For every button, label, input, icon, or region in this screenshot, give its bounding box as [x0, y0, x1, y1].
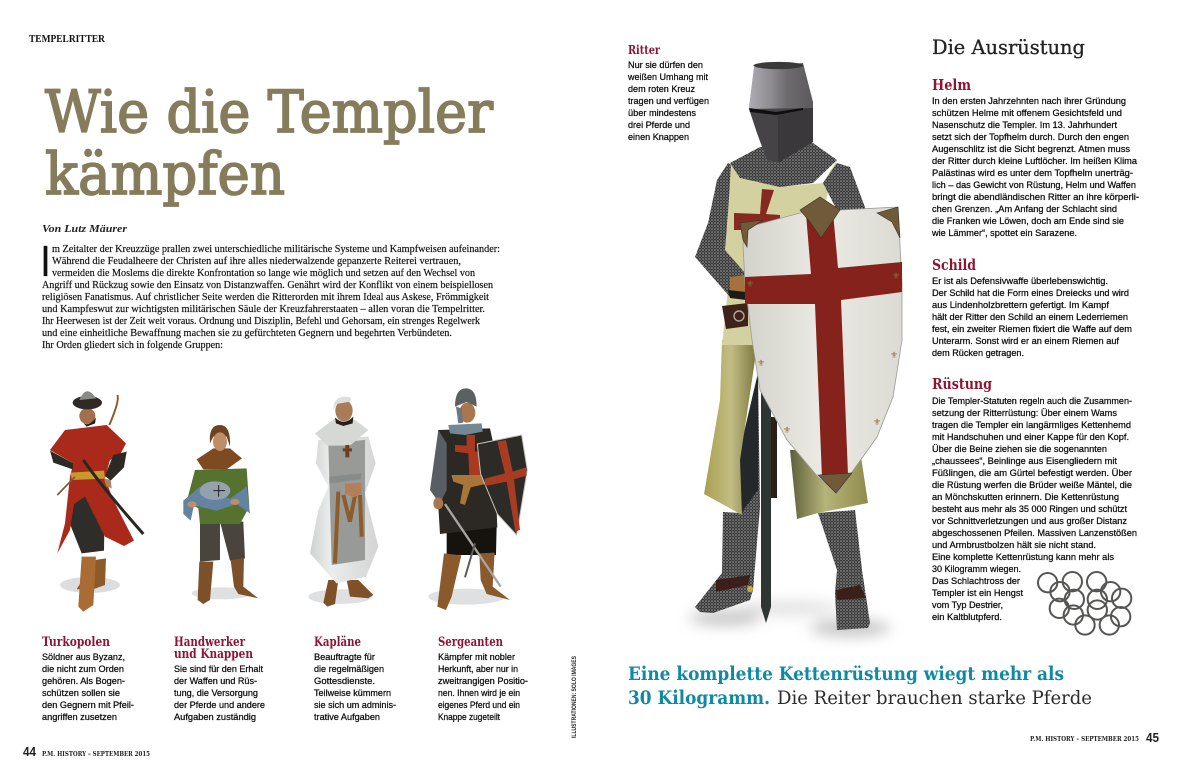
section: Rüstung: Templer ist ein Hengst — [932, 587, 1023, 598]
section: Helm — [931, 76, 1139, 238]
Ritter caption: über mindestens — [628, 107, 696, 118]
section: Schild: Unterarm. Sonst wird er an einem Riemen auf — [932, 335, 1119, 346]
ground shadow — [689, 601, 890, 636]
footer left — [23, 745, 150, 759]
Ritter caption: drei Pferde und — [628, 119, 690, 130]
caption: Kapläne: sie sich um adminis- — [314, 699, 396, 710]
caption: Kapläne: Gottesdienste. — [314, 675, 375, 686]
byline: Von Lutz Mäurer — [42, 223, 128, 235]
section: Rüstung: ein Kaltblutpferd. — [932, 611, 1002, 622]
section: Rüstung — [932, 375, 1137, 622]
caption: Turkopolen: Söldner aus Byzanz, — [42, 651, 125, 662]
shield: ⚜ — [757, 359, 765, 369]
caption: Handwerker und Knappen: Handwerker — [174, 635, 245, 650]
section: Schild — [932, 256, 1132, 358]
Ritter caption: tragen und verfügen — [628, 95, 709, 106]
section: Helm: Augenschlitz ist die Sicht begrenzt. Atmen muss — [932, 143, 1130, 154]
footer right — [1030, 731, 1159, 745]
section: Helm: Nasenschutz die Templer. Im 13. Jahrhundert — [932, 119, 1117, 130]
caption: Turkopolen: angriffen zusetzen — [42, 711, 117, 722]
shield: ⚜ — [873, 418, 881, 428]
caption: Sergeanten: zweitrangigen Positio- — [438, 675, 528, 686]
shield: ⚜ — [890, 351, 898, 361]
caption: Turkopolen — [42, 635, 134, 722]
caption: Turkopolen: die nicht zum Orden — [42, 663, 124, 674]
section: Helm: der Ritter durch kleine Luftlöcher. Im heißen Klima — [932, 155, 1138, 166]
intro text: I — [42, 237, 49, 286]
footer left: P.M. HISTORY – SEPTEMBER 2015 — [42, 750, 150, 758]
section: Schild: Der Schild hat die Form eines Dreiecks und wird — [932, 287, 1129, 298]
intro text — [42, 237, 500, 351]
illustration: Handwerker und Knappe — [183, 425, 258, 604]
shield cross — [745, 212, 902, 490]
caption: Handwerker und Knappen: und Knappen — [174, 647, 253, 662]
section: Rüstung: Über die Beine ziehen sie die sogenannten — [932, 443, 1107, 454]
section: Rüstung: abgeschossenen Pfeilen. Massiven Lanzenstößen — [932, 527, 1137, 538]
shield: ⚜ — [892, 272, 900, 282]
intro text: Während die Feudalheere der Christen auf ihre alles niederwalzende gepanzerte Reiterei vertrauen, — [52, 255, 461, 267]
Ritter caption — [627, 42, 709, 142]
section: Helm: Helm — [932, 76, 971, 94]
section: Rüstung: vor Schnittverletzungen und aus großer Distanz — [932, 515, 1127, 526]
icon: chain mail rings — [1038, 572, 1131, 635]
section: Rüstung: die Rüstung werfen die Brüder weiße Mäntel, die — [932, 479, 1132, 490]
section: Rüstung: und Armbrustbolzen hält sie nicht stand. — [932, 539, 1096, 550]
intro text: vermeiden die Moslems die direkte Konfrontation so lange wie möglich und setzen auf den Wechsel von — [52, 267, 475, 279]
section heading: Die Ausrüstung — [932, 36, 1085, 59]
sword — [761, 390, 777, 623]
caption: Handwerker und Knappen: Sie sind für den Erhalt — [174, 663, 263, 674]
intro text: Ihr Orden gliedert sich in folgende Gruppen: — [42, 339, 223, 351]
section: Rüstung: „chaussees“, Beinlinge aus Eisengliedern mit — [932, 455, 1117, 466]
title: kämpfen — [45, 140, 285, 208]
caption: Kapläne: Kapläne — [314, 635, 361, 650]
section: Rüstung: setzung der Ritterrüstung: Über einem Wams — [932, 407, 1117, 418]
section: Rüstung: tragen die Templer ein langärmliges Kettenhemd — [932, 419, 1131, 430]
section: Helm: lich – das Gewicht von Rüstung, Helm und Waffen — [932, 179, 1136, 190]
pull quote: 30 Kilogramm. — [628, 687, 770, 709]
section: Rüstung: Eine komplette Kettenrüstung kann mehr als — [932, 551, 1114, 562]
footer right: P.M. HISTORY – SEPTEMBER 2015 — [1030, 735, 1139, 743]
great helm — [749, 62, 813, 163]
caption: Handwerker und Knappen: der Waffen und Rüs- — [174, 675, 257, 686]
image credit: ILLUSTRATIONEN: SOLO IMAGES — [571, 656, 578, 738]
section: Schild: Er ist als Defensivwaffe überlebenswichtig. — [932, 275, 1108, 286]
section: Schild: hält der Ritter den Schild an einem Lederriemen — [932, 311, 1128, 322]
shield: ⚜ — [746, 280, 754, 290]
section: Rüstung: 30 Kilogramm wiegen. — [932, 563, 1021, 574]
section: Helm: In den ersten Jahrzehnten nach ihrer Gründung — [932, 95, 1126, 106]
section: Rüstung: mit Handschuhen und einer Kappe für den Kopf. — [932, 431, 1129, 442]
caption: Sergeanten: Sergeanten — [438, 635, 503, 650]
Ritter caption: Ritter — [628, 42, 660, 57]
caption: Sergeanten: Kämpfer mit nobler — [438, 651, 515, 662]
illustration: Turkopole — [50, 391, 143, 612]
caption: Sergeanten: eigenes Pferd und ein — [438, 699, 520, 710]
caption: Sergeanten: nen. Ihnen wird je ein — [438, 687, 520, 698]
section: Helm: die Franken wie Löwen, doch am Ende sind sie — [932, 215, 1124, 226]
Ritter caption: einen Knappen — [628, 131, 689, 142]
surcoat cross — [734, 189, 780, 230]
section: Schild: dem Rücken getragen. — [932, 347, 1024, 358]
caption: Kapläne: die regelmäßigen — [314, 663, 384, 674]
section: Helm: bringt die abendländischen Ritter an ihre körperli- — [932, 191, 1139, 202]
section: Schild: fest, ein zweiter Riemen fixiert die Waffe auf dem — [932, 323, 1132, 334]
caption: Kapläne: Teilweise kümmern — [314, 687, 391, 698]
section: Rüstung: besteht aus mehr als 35 000 Ringen und schützt — [932, 503, 1127, 514]
section: Rüstung: Das Schlachtross der — [932, 575, 1020, 586]
Ritter caption: weißen Umhang mit — [627, 71, 708, 82]
caption: Sergeanten: Herkunft, aber nur in — [438, 663, 518, 674]
caption: Turkopolen: Turkopolen — [42, 635, 110, 650]
footer left: 44 — [23, 745, 36, 759]
caption: Handwerker und Knappen: der Pferde und andere — [174, 699, 265, 710]
section: Helm: wie Lämmer“, spottet ein Sarazene. — [931, 227, 1077, 238]
illustration: Sergeant — [428, 388, 527, 610]
section: Helm: setzt sich der Topfhelm durch. Durch den engen — [932, 131, 1129, 142]
caption: Turkopolen: schützen sollen sie — [42, 687, 120, 698]
title — [45, 78, 493, 208]
section: Schild: aus Lindenholzbrettern gefertigt. Im Kampf — [932, 299, 1109, 310]
caption: Kapläne: Beauftragte für — [314, 651, 375, 662]
shield — [740, 197, 902, 493]
caption: Turkopolen: gehören. Als Bogen- — [42, 675, 125, 686]
mail arms and coif — [695, 143, 866, 297]
section: Helm: chen Grenzen. „Am Anfang der Schlacht sind — [932, 203, 1117, 214]
caption: Sergeanten — [438, 635, 528, 722]
footer right: 45 — [1146, 731, 1159, 745]
caption: Handwerker und Knappen — [174, 635, 265, 722]
title: Wie die Templer — [45, 78, 493, 146]
illustration: Tempelritter — [689, 62, 902, 636]
intro text: Angriff und Rückzug sowie den Einsatz von Distanzwaffen. Genährt wird der Konflikt von einem beispiellosen — [42, 279, 493, 291]
Ritter caption: Nur sie dürfen den — [628, 59, 703, 70]
caption: Kapläne — [314, 635, 396, 722]
pull quote: Eine komplette Kettenrüstung wiegt mehr als — [628, 663, 1064, 685]
caption: Sergeanten: Knappe zugeteilt — [438, 711, 500, 722]
intro text: Ihr Heerwesen ist der Zeit weit voraus. Ordnung und Disziplin, Befehl und Gehorsam, ein strenges Regelwerk — [42, 315, 480, 327]
section: Rüstung: vom Typ Destrier, — [932, 599, 1003, 610]
surcoat — [704, 160, 868, 519]
section: Rüstung: Die Templer-Statuten regeln auch die Zusammen- — [932, 395, 1132, 406]
intro text: und Kampfeswut zur wichtigsten militärischen Säule der Kreuzfahrerstaaten – allen voran die Tempelritter. — [42, 303, 485, 315]
caption: Kapläne: trative Aufgaben — [314, 711, 380, 722]
intro text: m Zeitalter der Kreuzzüge prallen zwei unterschiedliche militärische Systeme und Kampfweisen aufeinander: — [52, 243, 500, 255]
intro text: religiösen Fanatismus. Auf christlicher Seite werden die Ritterorden mit ihrem Ideal aus Askese, Frömmigkeit — [42, 291, 489, 303]
legs and sabatons — [695, 373, 870, 630]
section: Rüstung: Rüstung — [932, 375, 992, 393]
intro text: und eine einheitliche Bewaffnung machen sie zu gefürchteten Gegnern und begehrten Verbündeten. — [42, 327, 452, 339]
Ritter caption: dem roten Kreuz — [628, 83, 695, 94]
caption: Handwerker und Knappen: Aufgaben zuständig — [174, 711, 256, 722]
shield: ⚜ — [783, 426, 791, 436]
section: Rüstung: Füßlingen, die am Gürtel befestigt werden. Über — [932, 467, 1132, 478]
section: Helm: Palästinas wird es unter dem Topfhelm unerträg- — [932, 167, 1133, 178]
pull quote — [628, 663, 1092, 709]
running head: TEMPELRITTER — [29, 34, 106, 45]
caption: Turkopolen: den Gegnern mit Pfeil- — [42, 699, 134, 710]
pull quote: Die Reiter brauchen starke Pferde — [777, 687, 1092, 709]
illustration: Kaplan — [308, 397, 378, 607]
gloved hand and belt — [722, 275, 748, 329]
section: Rüstung: an Mönchskutten erinnern. Die Kettenrüstung — [932, 491, 1119, 502]
section: Helm: schützen Helme mit offenem Gesichtsfeld und — [932, 107, 1122, 118]
section: Schild: Schild — [932, 256, 976, 274]
shield ornaments — [740, 197, 900, 493]
caption: Handwerker und Knappen: tung, die Versorgung — [174, 687, 258, 698]
